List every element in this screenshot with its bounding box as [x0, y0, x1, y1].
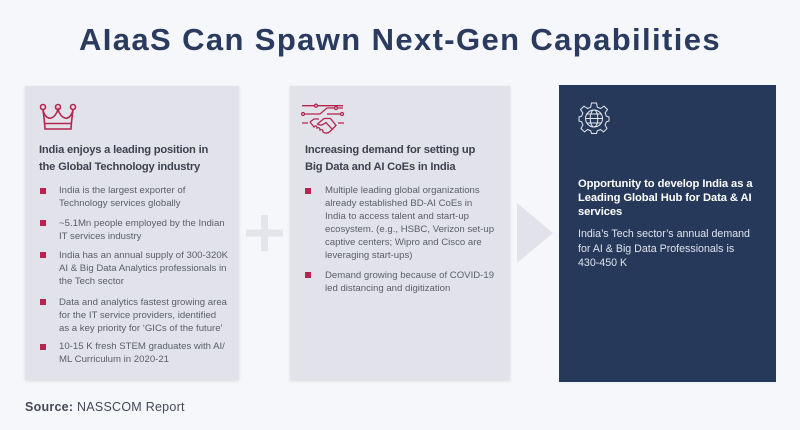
bullet 1 text	[325, 185, 494, 261]
bullet 4 marker	[40, 299, 46, 305]
bullet 3 text	[59, 250, 228, 287]
bullet 2 text: IT services industry	[59, 231, 141, 242]
heading: Opportunity to develop India as a	[578, 178, 753, 190]
bullet 1 text	[59, 185, 186, 209]
bullet 5 text: 10-15 K fresh STEM graduates with AI/	[59, 341, 225, 352]
icon: handshake with circuit lines	[301, 104, 344, 134]
bullet list	[40, 185, 228, 365]
bullet 3 marker	[40, 252, 46, 258]
panel: opportunity	[559, 85, 776, 382]
heading	[39, 144, 208, 173]
heading	[578, 178, 753, 218]
bullet 1 marker	[305, 188, 311, 194]
bullet 1 text: leveraging start-ups)	[325, 250, 412, 261]
panel: increasing demand	[290, 86, 510, 380]
bullet 2 marker	[305, 272, 311, 278]
heading: the Global Technology industry	[39, 161, 200, 173]
bullet 4 text: as a key priority for ‘GICs of the future’	[59, 323, 223, 334]
body text	[578, 228, 750, 269]
heading: Increasing demand for setting up	[305, 144, 475, 156]
bullet 1 text: India is the largest exporter of	[59, 185, 185, 196]
bullet 1 marker	[40, 188, 46, 194]
icon: gear with globe	[578, 102, 610, 134]
bullet 5 marker	[40, 344, 46, 350]
bullet 1 text: Multiple leading global organizations	[325, 185, 480, 196]
bullet 5 text: ML Curriculum in 2020-21	[59, 354, 169, 365]
bullet 1 text: Technology services globally	[59, 198, 181, 209]
body text: India’s Tech sector’s annual demand	[578, 228, 750, 240]
arrow	[517, 203, 553, 263]
bullet 1 text: captive centers; Wipro and Cisco are	[325, 237, 482, 248]
bullet 2 text: led distancing and digitization	[325, 283, 450, 294]
bullet 2 text: Demand growing because of COVID-19	[325, 270, 494, 281]
body text: for AI & Big Data Professionals is	[578, 242, 734, 254]
icon: plus sign	[246, 215, 283, 251]
bullet 5 text	[59, 341, 225, 365]
bullet 3 text: AI & Big Data Analytics professionals in	[59, 263, 226, 274]
heading: India enjoys a leading position in	[39, 144, 208, 156]
title: AIaaS Can Spawn Next-Gen Capabilities	[79, 22, 721, 57]
bullet 3 text: the Tech sector	[59, 276, 124, 287]
bullet 2 text	[325, 270, 494, 294]
bullet 2 marker	[40, 220, 46, 226]
heading	[305, 144, 475, 173]
bullet 3 text: India has an annual supply of 300-320K	[59, 250, 228, 261]
bullet 1 text: ecosystem. (e.g., HSBC, Verizon set-up	[325, 224, 494, 235]
heading: services	[578, 206, 622, 218]
bullet 2 text: ~5.1Mn people employed by the Indian	[59, 218, 225, 229]
bullet 4 text: for the IT service providers, identified	[59, 310, 216, 321]
body text: 430-450 K	[578, 257, 627, 269]
bullet 4 text	[59, 297, 227, 334]
heading: Leading Global Hub for Data & AI	[578, 192, 752, 204]
bullet 1 text: India to access talent and start-up	[325, 211, 469, 222]
panel: India leading position	[25, 86, 239, 380]
bullet 2 text	[59, 218, 225, 242]
bullet 1 text: already established BD-AI CoEs in	[325, 198, 472, 209]
bullet list	[305, 185, 494, 294]
heading: Big Data and AI CoEs in India	[305, 161, 455, 173]
bullet 4 text: Data and analytics fastest growing area	[59, 297, 227, 308]
source note: Source: NASSCOM Report	[25, 400, 185, 414]
icon: crown	[40, 104, 76, 130]
